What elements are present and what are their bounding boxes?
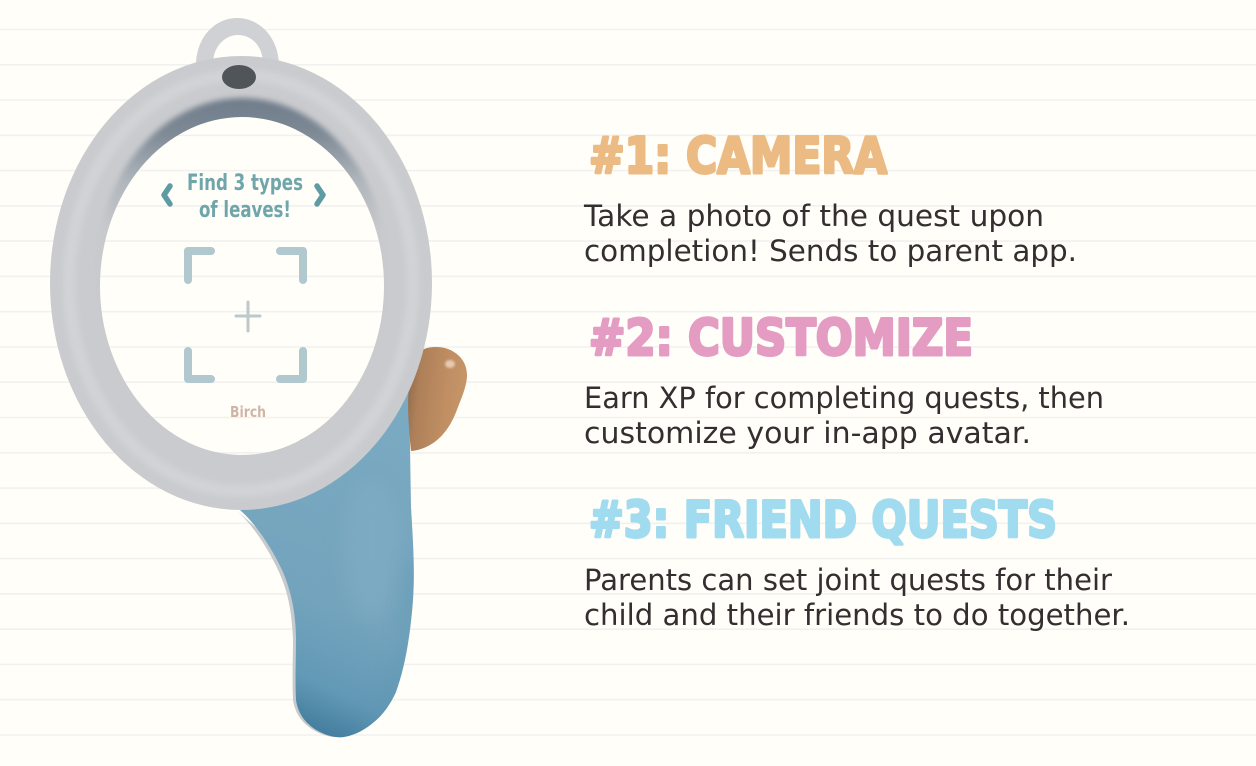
screen chevrons xyxy=(164,186,323,204)
description: friend quests: child and their friends to do together. xyxy=(584,598,1130,632)
screen prompt text xyxy=(187,171,303,223)
feature: camera xyxy=(583,127,1077,268)
device handle xyxy=(236,385,415,737)
viewfinder ring xyxy=(50,56,432,510)
side button xyxy=(408,347,467,451)
heading: camera: #1: CAMERA xyxy=(589,127,887,185)
camera lens xyxy=(222,65,256,89)
leaf label: Birch xyxy=(230,403,266,421)
description: friend quests: Parents can set joint quests for their xyxy=(584,563,1112,597)
heading: friend quests: #3: FRIEND QUESTS xyxy=(589,491,1057,549)
crosshair xyxy=(236,302,260,331)
description: camera: completion! Sends to parent app. xyxy=(584,234,1077,268)
device illustration xyxy=(50,18,467,737)
description: customize xyxy=(584,381,1104,450)
description: camera xyxy=(583,199,1077,268)
strap loop xyxy=(196,18,279,66)
camera frame corners xyxy=(188,251,303,379)
device screen xyxy=(164,171,323,421)
screen prompt text: Find 3 types xyxy=(187,171,303,196)
description: camera: Take a photo of the quest upon xyxy=(583,199,1044,233)
description: customize: Earn XP for completing quests, then xyxy=(584,381,1104,415)
heading: customize: #2: CUSTOMIZE xyxy=(589,309,973,367)
feature: friend quests xyxy=(584,491,1130,632)
feature: customize xyxy=(584,309,1104,450)
description: friend quests xyxy=(584,563,1130,632)
description: customize: customize your in-app avatar. xyxy=(584,416,1031,450)
screen prompt text: of leaves! xyxy=(199,198,291,223)
